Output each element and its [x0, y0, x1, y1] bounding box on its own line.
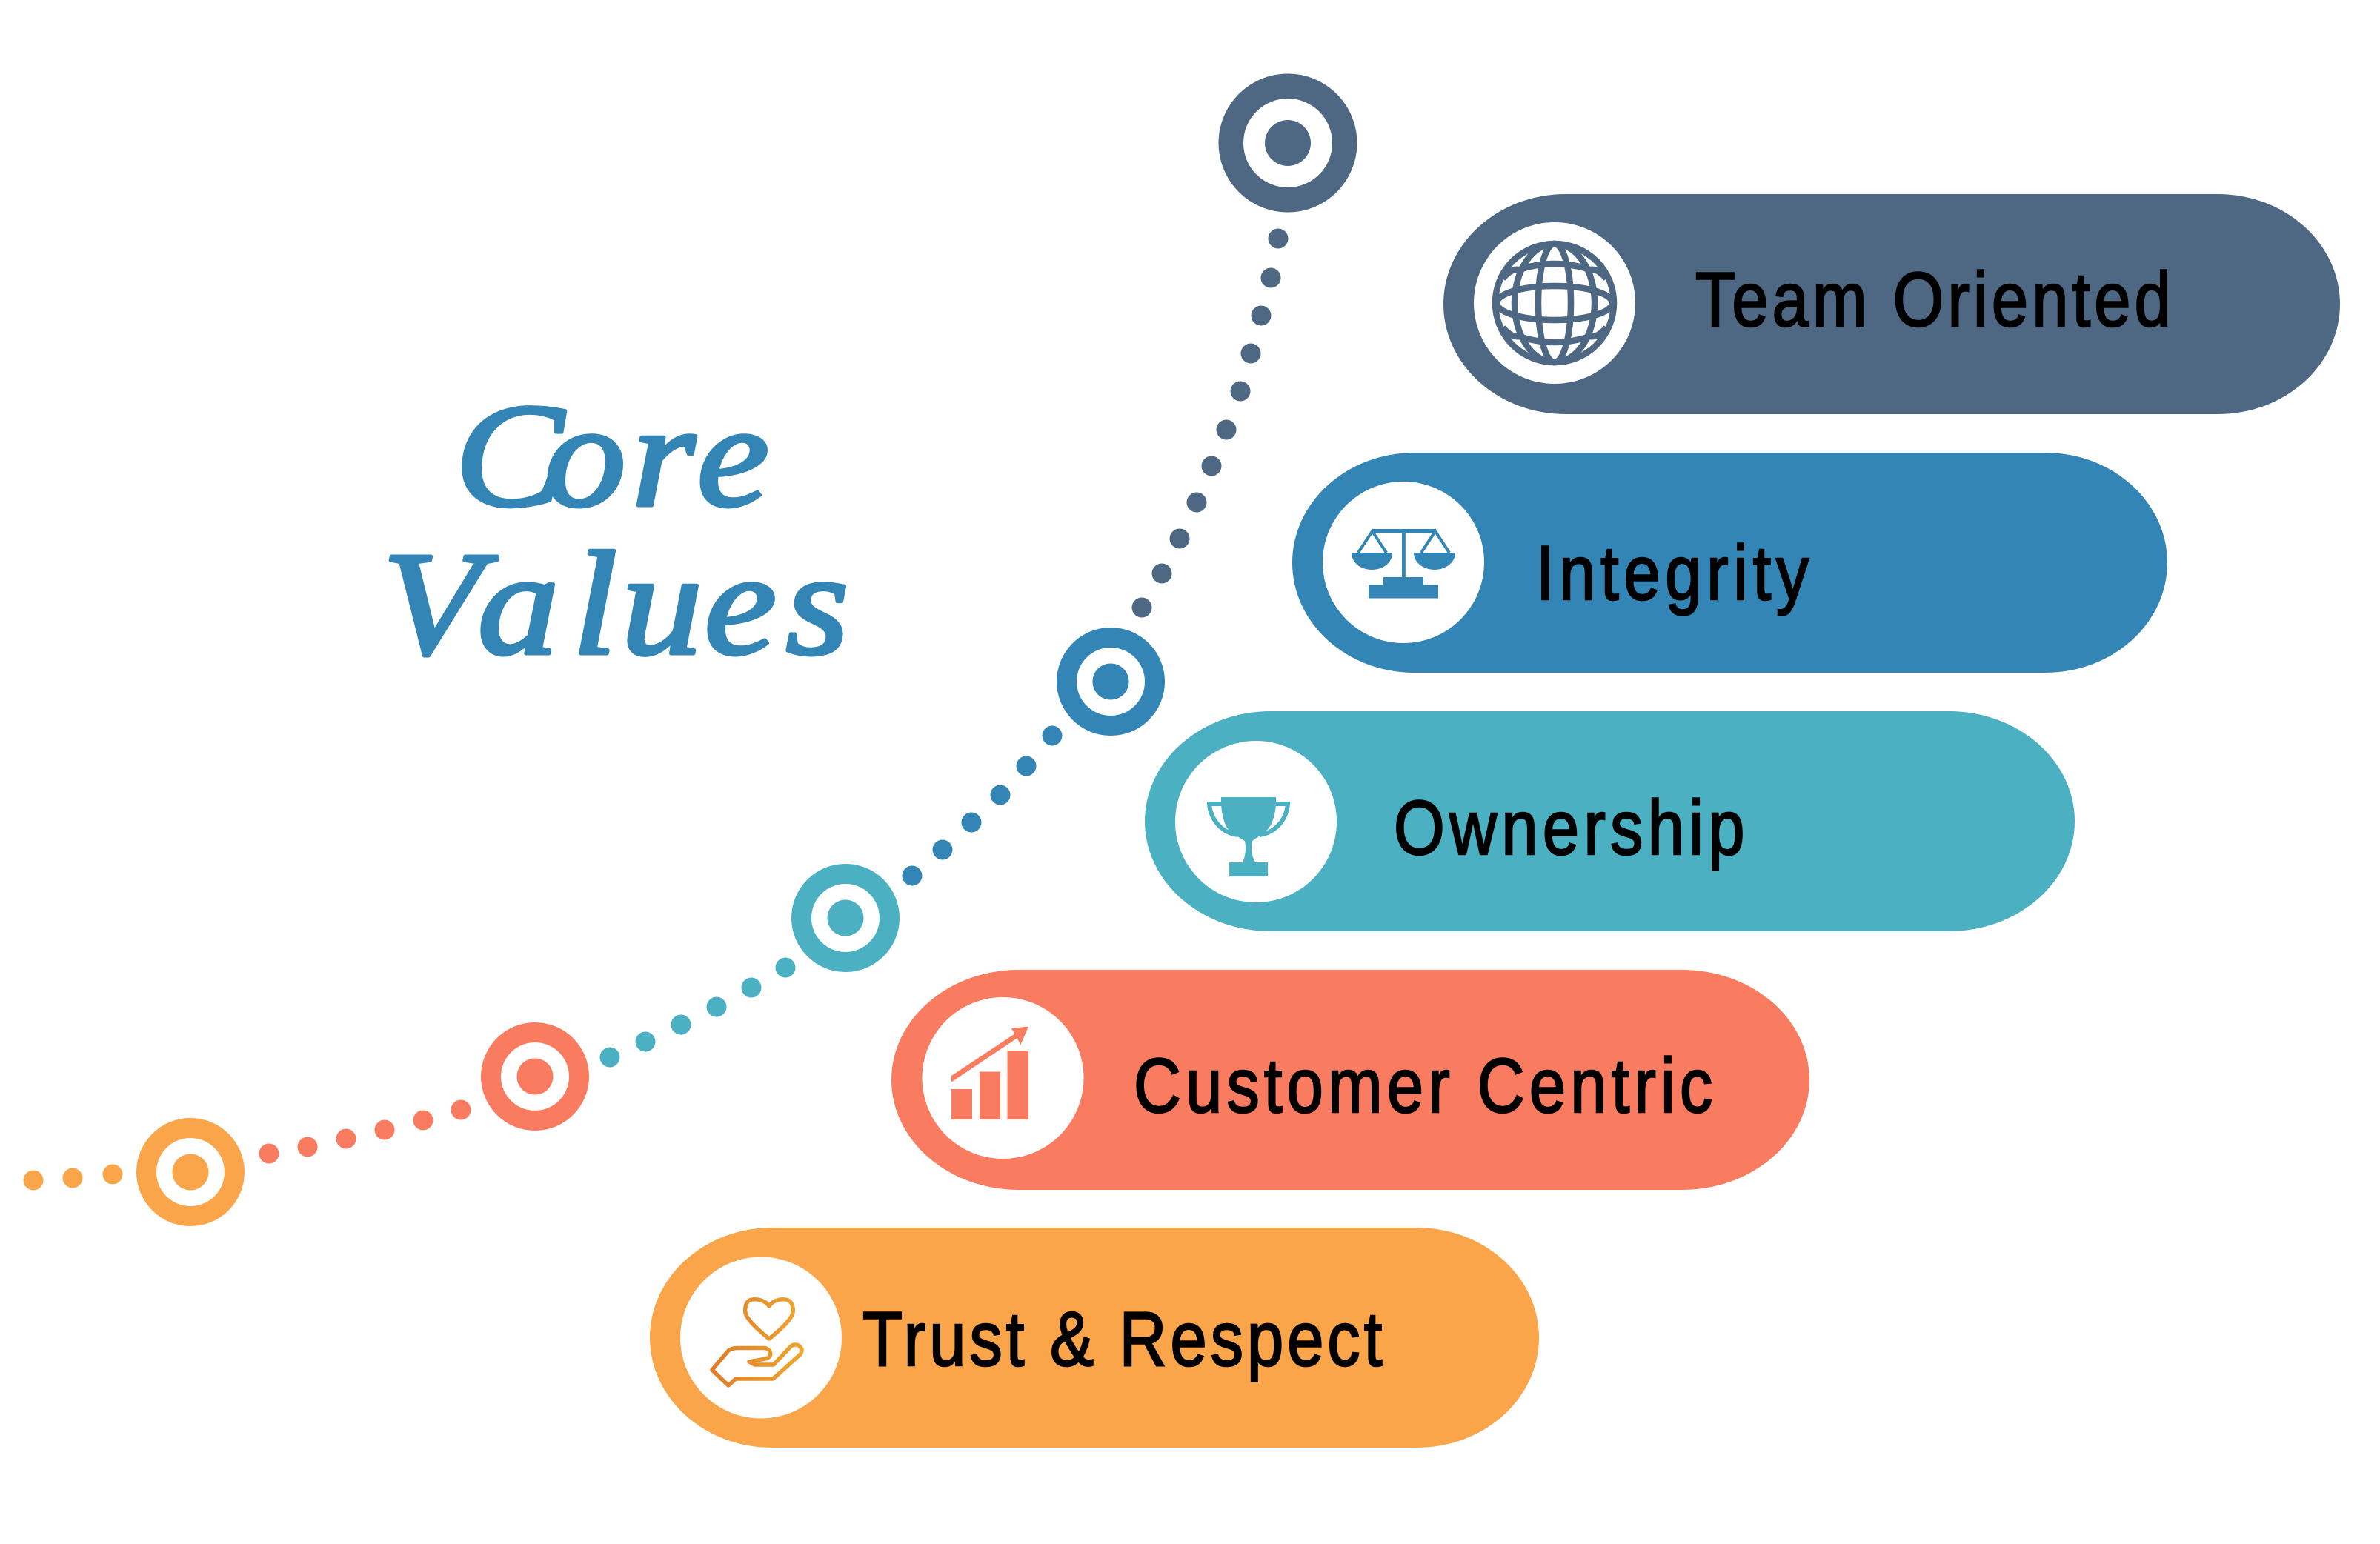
label: Integrity — [1536, 530, 1809, 616]
panel: team oriented — [1443, 194, 2340, 414]
label: Ownership — [1394, 785, 1744, 871]
blue target — [1057, 628, 1165, 736]
coral target — [481, 1022, 589, 1131]
dotted path with target markers — [24, 74, 1357, 1226]
blue dots — [903, 726, 1063, 886]
slate target — [1218, 74, 1357, 212]
orange target — [136, 1118, 245, 1226]
label: Team Oriented — [1695, 257, 2171, 343]
label: Customer Centric — [1134, 1043, 1712, 1129]
orange dots — [24, 1165, 123, 1190]
icon: heart in hand — [712, 1300, 802, 1385]
panel: customer centric — [891, 970, 1809, 1190]
title: Values — [382, 522, 849, 686]
icon: scales — [1352, 529, 1455, 599]
panel: integrity — [1292, 453, 2167, 673]
title — [382, 374, 849, 686]
teal target — [791, 864, 900, 972]
title: Core — [455, 374, 769, 538]
icon: globe — [1495, 244, 1614, 362]
teal dots — [600, 957, 796, 1067]
coral dots — [259, 1099, 471, 1163]
panel: trust and respect — [650, 1228, 1539, 1448]
slate dots — [1132, 228, 1288, 618]
icon: growth chart — [951, 1027, 1028, 1119]
panel: ownership — [1145, 711, 2075, 931]
label: Trust & Respect — [862, 1297, 1382, 1382]
icon: trophy — [1209, 797, 1288, 876]
